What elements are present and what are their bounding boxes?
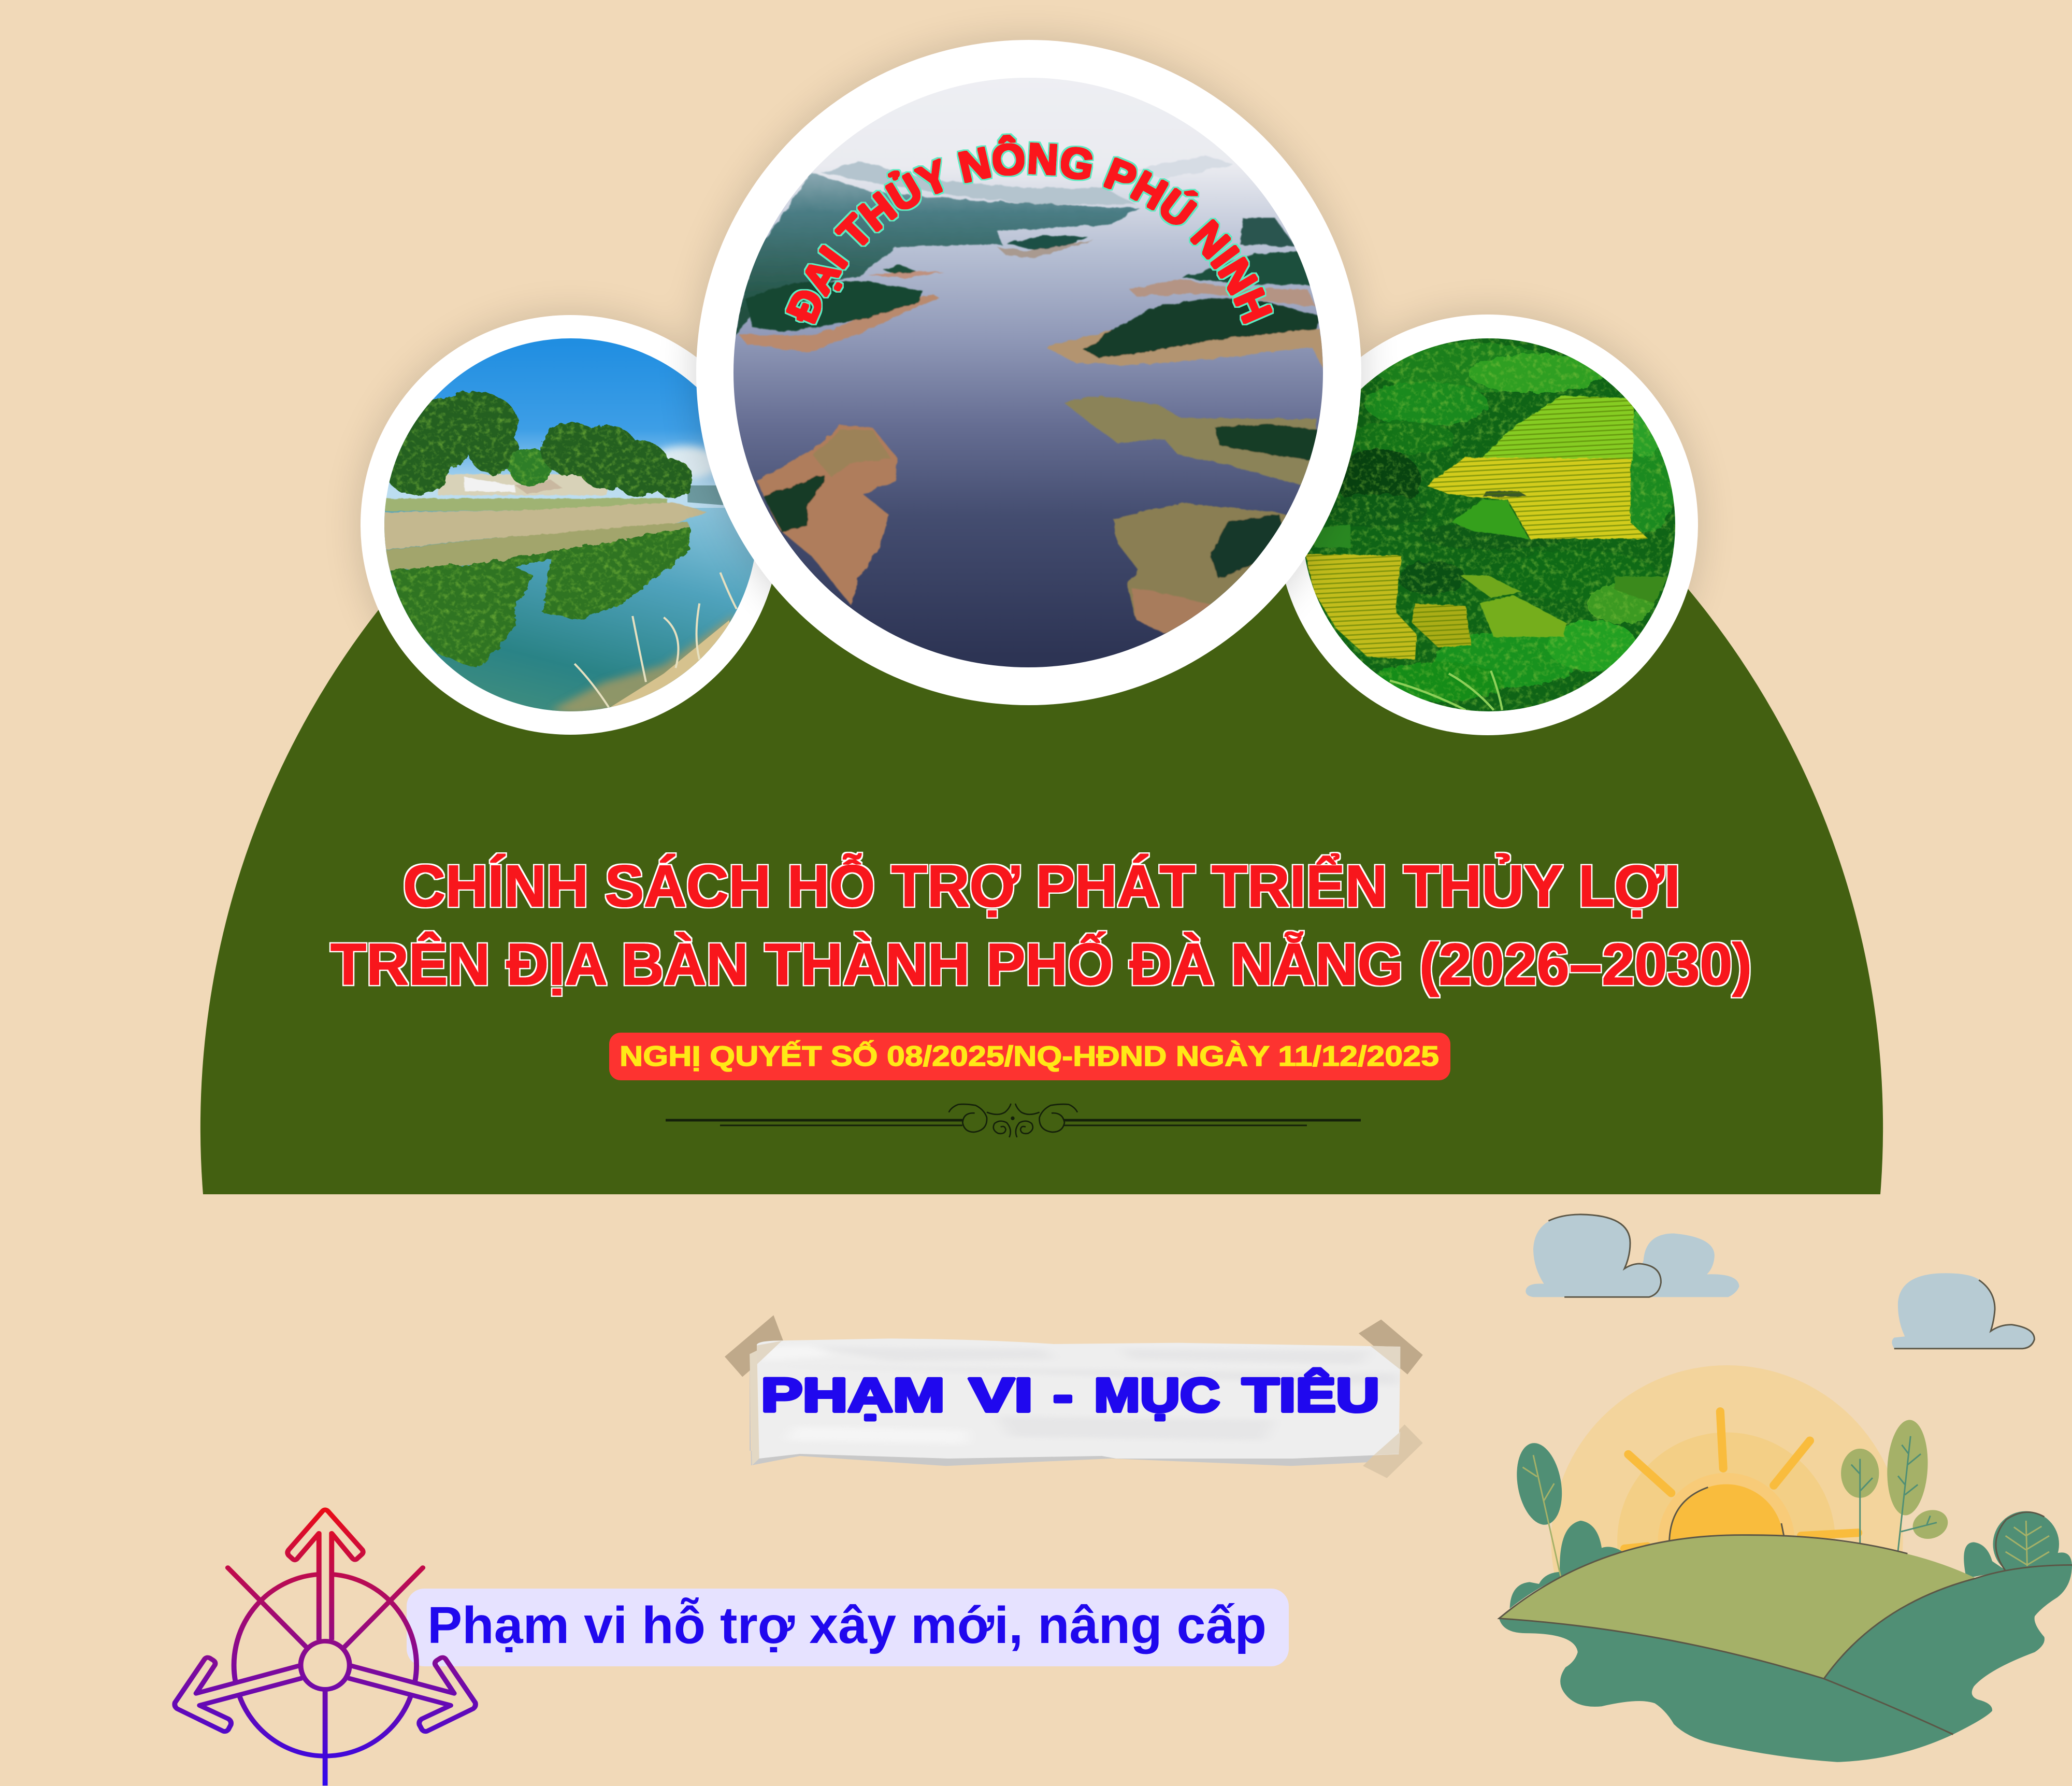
tape pieces bbox=[725, 1315, 1423, 1478]
diagonal spokes bbox=[228, 1568, 423, 1647]
hub bbox=[301, 1641, 350, 1689]
icon: compass arrows bbox=[175, 1510, 476, 1785]
banner heading words bbox=[761, 1368, 1379, 1422]
title: TRÊN ĐỊA BÀN THÀNH PHỐ ĐÀ NẴNG (2026–2030) bbox=[330, 932, 1752, 997]
teal ground bbox=[1499, 1565, 2072, 1762]
ring bbox=[234, 1574, 416, 1756]
left arrow bbox=[175, 1658, 302, 1732]
photo: canal with trees bbox=[361, 315, 772, 735]
banner paper bbox=[750, 1338, 1400, 1465]
right arrow bbox=[348, 1658, 476, 1732]
banner heading words: MỤC bbox=[1094, 1369, 1220, 1422]
photo: rice terraces bbox=[1286, 315, 1698, 735]
soft shadows around circles bbox=[361, 40, 1698, 735]
plants behind hill bbox=[1510, 1419, 2072, 1609]
stem bbox=[319, 1691, 332, 1785]
subtitle pill: NGHỊ QUYẾT SỐ 08/2025/NQ-HĐND NGÀY 11/12/2025 bbox=[620, 1040, 1439, 1072]
banner heading words: VI bbox=[969, 1369, 1033, 1422]
arc text: agency name: ĐẠI THỦY NÔNG PHÚ NINH bbox=[784, 133, 1274, 325]
hill outlines bbox=[1499, 1535, 2072, 1734]
panel: green dome bbox=[200, 373, 1883, 1194]
title: CHÍNH SÁCH HỖ TRỢ PHÁT TRIỂN THỦY LỢI bbox=[403, 853, 1680, 919]
title bbox=[330, 853, 1752, 997]
banner heading words: TIÊU bbox=[1242, 1368, 1379, 1422]
cloud right bbox=[1892, 1273, 2034, 1349]
up arrow bbox=[287, 1510, 363, 1640]
banner heading words: PHẠM bbox=[761, 1369, 945, 1422]
cloud group left bbox=[1526, 1215, 1739, 1297]
sun and rays bbox=[1551, 1365, 1903, 1716]
banner heading words: - bbox=[1053, 1369, 1073, 1422]
label pill: scope of support: Phạm vi hỗ trợ xây mới, nâng cấp bbox=[427, 1596, 1267, 1654]
banner: scope and objectives bbox=[725, 1315, 1423, 1478]
olive hill bbox=[1499, 1535, 1976, 1679]
ornament divider bbox=[666, 1104, 1361, 1137]
banner shadow bbox=[750, 1351, 1392, 1466]
photo: reservoir bbox=[680, 40, 1377, 705]
scene: clouds, sun and hills bbox=[1499, 1215, 2072, 1762]
subtitle pill bbox=[609, 1033, 1450, 1080]
